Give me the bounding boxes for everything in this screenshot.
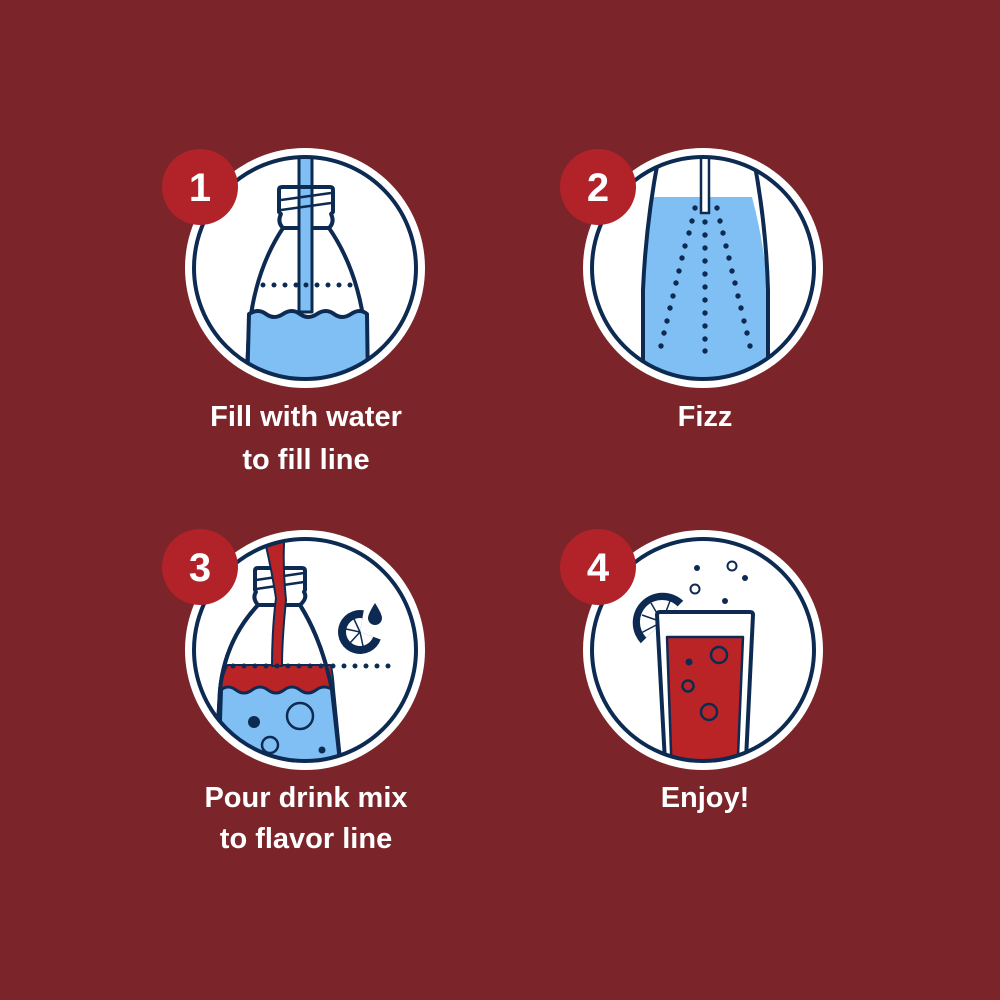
panel: step 2 fizz (560, 140, 823, 390)
caption: step 4: Enjoy! (661, 782, 749, 814)
panel: step 4 enjoy (560, 529, 823, 780)
caption: step 2: Fizz (678, 401, 732, 433)
caption: step 1: Fill with water (210, 401, 402, 433)
badge: 1 (162, 149, 238, 225)
icon: lime and drop (338, 603, 382, 654)
illustration: bottle with drink mix pouring (216, 542, 390, 759)
illustration: bottle with spray (641, 159, 770, 377)
badge: 4: 4 (587, 546, 610, 590)
illustration: bottle with water and straw (246, 159, 370, 377)
caption: step 1: to fill line (242, 444, 370, 476)
panel: step 3 pour drink mix (162, 529, 425, 780)
badge: 3 (162, 529, 238, 605)
badge: 4 (560, 529, 636, 605)
badge: 1: 1 (189, 166, 211, 210)
panel: step 1 fill with water (162, 140, 425, 390)
badge: 2: 2 (587, 166, 609, 210)
badge: 2 (560, 149, 636, 225)
caption: step 3: Pour drink mix (204, 782, 408, 814)
caption: step 3: to flavor line (220, 823, 392, 855)
badge: 3: 3 (189, 546, 211, 590)
illustration: glass of drink (657, 612, 753, 780)
bubbles above glass (690, 562, 748, 604)
icon: lime slice (633, 593, 683, 643)
